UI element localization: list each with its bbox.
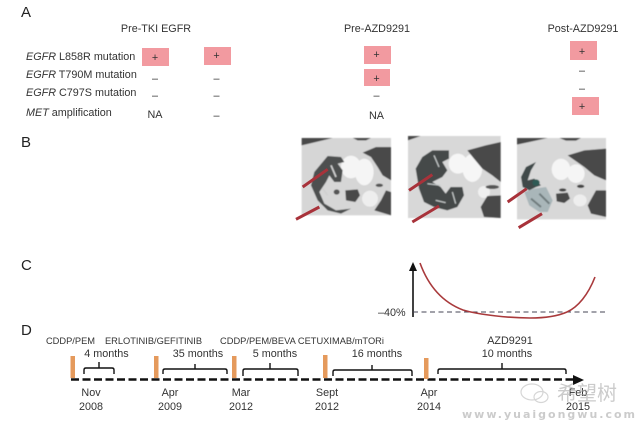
therapy names: ERLOTINIB/GEFITINIB <box>105 336 202 346</box>
timeline arrow <box>71 375 584 385</box>
dates: Nov <box>81 387 101 399</box>
durations: 5 months <box>253 348 298 360</box>
cell values: + <box>579 101 585 113</box>
dates: 2012 <box>229 401 253 413</box>
tumor size curve <box>420 263 595 318</box>
icon: chat bubble <box>521 384 548 402</box>
column heading: Pre-TKI EGFR: Pre-TKI EGFR <box>121 23 191 35</box>
dates <box>79 387 590 413</box>
row label: L858R: EGFR L858R mutation <box>26 51 135 63</box>
cell values: + <box>373 73 380 85</box>
therapy names: AZD9291 <box>487 335 533 347</box>
cell values: – <box>152 90 158 102</box>
therapy names: CDDP/PEM <box>46 336 95 346</box>
therapy names: CDDP/PEM/BEVA CETUXIMAB/mTORi <box>220 336 384 346</box>
cell values: – <box>213 110 220 122</box>
watermark url: www.yuaigongwu.com <box>462 408 635 421</box>
panel: response curve <box>378 262 607 319</box>
brackets <box>84 362 566 376</box>
cell values: NA <box>148 109 163 121</box>
cell values: – <box>579 83 585 95</box>
arrows <box>409 175 439 222</box>
column heading: Pre-AZD9291: Pre-AZD9291 <box>344 23 410 35</box>
dates: Apr <box>421 387 438 399</box>
panel label C: C <box>21 257 32 274</box>
panel label D: D <box>21 322 32 339</box>
cell values: – <box>213 73 220 85</box>
watermark name: 希望树 <box>557 382 617 405</box>
cell values: + <box>579 46 585 58</box>
dates: 2009 <box>158 401 182 413</box>
panel: treatment timeline <box>46 335 590 413</box>
dates: 2014 <box>417 401 441 413</box>
treatment markers <box>70 355 428 379</box>
cell values: NA <box>369 110 385 122</box>
durations: 35 months <box>173 348 224 360</box>
durations <box>84 348 533 360</box>
durations: 10 months <box>482 348 533 360</box>
watermark <box>462 382 635 421</box>
arrows <box>508 189 542 228</box>
dates: 2012 <box>315 401 339 413</box>
y axis arrowhead <box>409 262 417 271</box>
cell values: + <box>152 52 158 64</box>
panel label B: B <box>21 134 31 151</box>
cell values <box>148 46 585 122</box>
dates: Feb <box>569 387 587 399</box>
panel: mutation table <box>26 23 618 122</box>
dates: 2015 <box>566 401 590 413</box>
row label: T790M: EGFR T790M mutation <box>26 69 137 81</box>
dates: 2008 <box>79 401 103 413</box>
panel: CT scan 3 <box>508 138 606 228</box>
column heading: Post-AZD9291: Post-AZD9291 <box>548 23 618 35</box>
dates: Sept <box>316 387 338 399</box>
cell values: – <box>579 65 585 77</box>
cell values: – <box>213 90 220 102</box>
threshold line <box>413 311 607 313</box>
panel: CT scan 2 <box>408 136 501 222</box>
positive cells <box>142 41 599 115</box>
threshold label: –40% <box>378 307 406 319</box>
durations: 4 months <box>84 348 129 360</box>
cell values: + <box>213 50 220 62</box>
arrows <box>296 169 328 219</box>
panel: CT scan 1 <box>296 138 391 219</box>
dates: Apr <box>162 387 179 399</box>
y axis arrow <box>412 264 414 317</box>
cell values: + <box>373 49 380 61</box>
row label: MET: MET amplification <box>26 107 112 119</box>
panel label A: A <box>21 4 31 21</box>
durations: 16 months <box>352 348 403 360</box>
cell values: – <box>152 73 158 85</box>
cell values: – <box>373 90 380 102</box>
row label: C797S: EGFR C797S mutation <box>26 87 136 99</box>
therapy names <box>46 335 533 347</box>
dates: Mar <box>232 387 251 399</box>
